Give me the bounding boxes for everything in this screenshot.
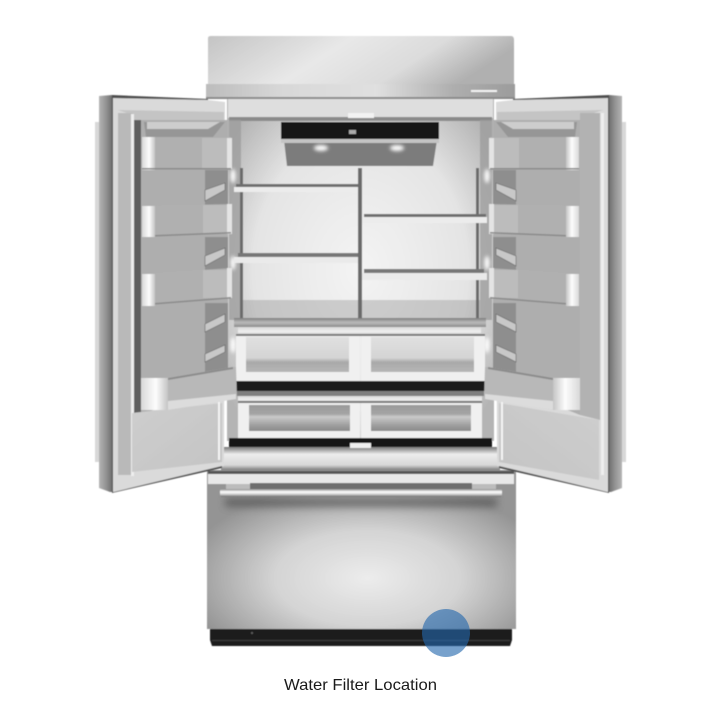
trim band with brand badge <box>206 84 515 99</box>
lower door panel <box>499 403 599 480</box>
inner door rib <box>580 113 600 420</box>
interior side lights <box>230 169 490 353</box>
upper left drawer <box>236 336 360 381</box>
door bracket 2 <box>205 248 225 266</box>
door bin 2 <box>142 204 232 237</box>
door bracket 2 <box>496 248 516 266</box>
door bin 3 <box>489 268 579 306</box>
door bin 1 <box>489 137 579 170</box>
door brackets 3 and 4 <box>496 314 516 362</box>
freezer drawer front <box>207 470 516 629</box>
upper right drawer <box>361 336 485 381</box>
interior cabinet <box>227 99 494 441</box>
upper drawer cover <box>234 318 486 327</box>
lower left drawer <box>238 403 360 438</box>
door bin 4 <box>484 367 580 410</box>
top grille cap <box>206 36 515 99</box>
lower door panel <box>132 403 222 472</box>
door bin 3 <box>142 268 232 306</box>
door liner <box>493 120 580 415</box>
water filter highlight circle <box>422 609 470 657</box>
door outer edge <box>99 95 112 492</box>
refrigerator photo <box>95 36 626 646</box>
door bracket 1 <box>205 183 225 201</box>
caption: Water Filter Location <box>284 677 437 694</box>
handle bar <box>220 489 502 497</box>
left open door <box>99 95 237 493</box>
lower cabinet rail <box>221 443 500 471</box>
control display and lights <box>281 122 439 166</box>
door bin 1 <box>142 137 232 170</box>
door bin 2 <box>489 204 579 237</box>
black toe kick <box>210 629 512 646</box>
door gasket frame <box>496 96 609 492</box>
bottom wall shade <box>241 300 480 318</box>
handle brackets <box>250 483 472 489</box>
crisper drawers <box>229 318 492 447</box>
door bin 4 <box>141 367 237 410</box>
door bracket 1 <box>496 183 516 201</box>
door outer edge <box>609 95 622 492</box>
faint side strips of door panels <box>95 122 626 462</box>
left and right shelves <box>234 184 487 280</box>
door liner <box>141 120 228 415</box>
lower right drawer <box>361 403 482 438</box>
shelf rails <box>240 168 479 320</box>
door gasket frame <box>112 96 225 492</box>
door latch <box>348 113 374 118</box>
hinge side shaded strip <box>205 170 228 372</box>
right open door <box>484 95 622 493</box>
black gap <box>234 381 486 391</box>
handle shadow <box>225 498 497 507</box>
hinge side shaded strip <box>493 170 516 372</box>
door brackets 3 and 4 <box>205 314 225 362</box>
inner door rib <box>118 113 133 475</box>
ceiling band <box>228 99 493 118</box>
